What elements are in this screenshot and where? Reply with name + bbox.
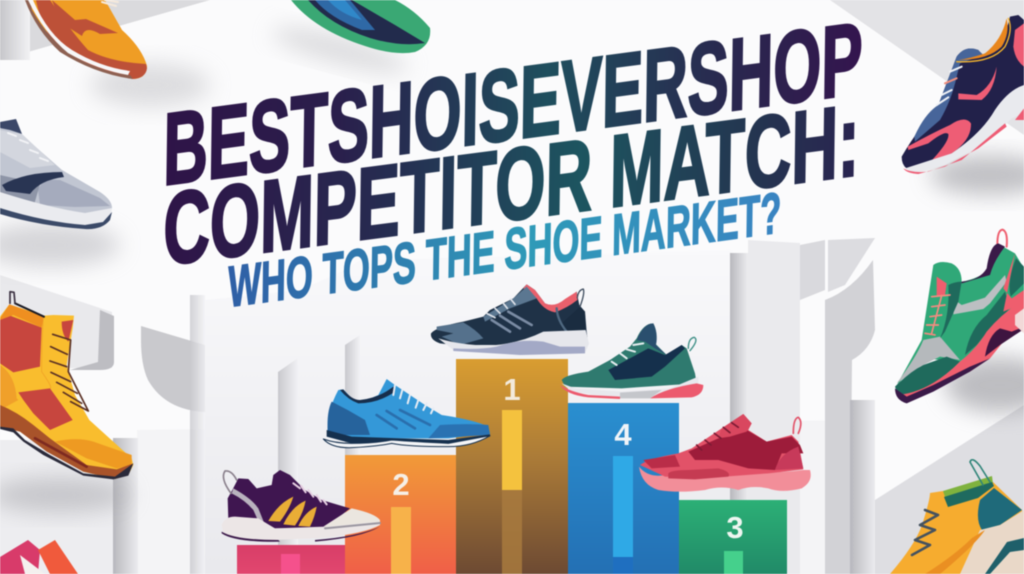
bar: rank 1 gold: 1 bbox=[503, 372, 521, 407]
shoe: navy top right bbox=[902, 15, 1024, 174]
shoe: green top bbox=[291, 0, 430, 53]
boot: yellow left bbox=[0, 292, 133, 479]
shoe 1: navy on top podium bbox=[431, 284, 589, 355]
bar: rank 3 green bbox=[679, 500, 787, 574]
bar: rank 2 orange bbox=[345, 455, 456, 574]
shoe 2: blue on second podium bbox=[323, 379, 490, 448]
shoe: grey left bbox=[0, 119, 112, 229]
shoe: pink bottom left corner bbox=[0, 540, 78, 574]
shoe 3: teal on fourth podium bbox=[560, 323, 703, 399]
podium bar chart bbox=[237, 359, 787, 574]
shoe: yellow bottom right bbox=[890, 460, 1024, 574]
bar: rank 4 blue bbox=[568, 403, 679, 574]
bar: rank 3 green: 3 bbox=[726, 510, 744, 545]
bar: rank 5 pink bbox=[237, 545, 345, 574]
bar: rank 2 orange: 2 bbox=[392, 467, 410, 502]
title bbox=[163, 0, 863, 320]
shoe 4: red front podium bbox=[639, 414, 811, 492]
shoe: green right bbox=[895, 230, 1024, 403]
shoe 5: purple front left bbox=[222, 470, 380, 542]
shoe: orange top left bbox=[25, 0, 147, 79]
bar: rank 4 blue: 4 bbox=[614, 417, 632, 452]
bar: rank 1 gold bbox=[456, 359, 568, 574]
